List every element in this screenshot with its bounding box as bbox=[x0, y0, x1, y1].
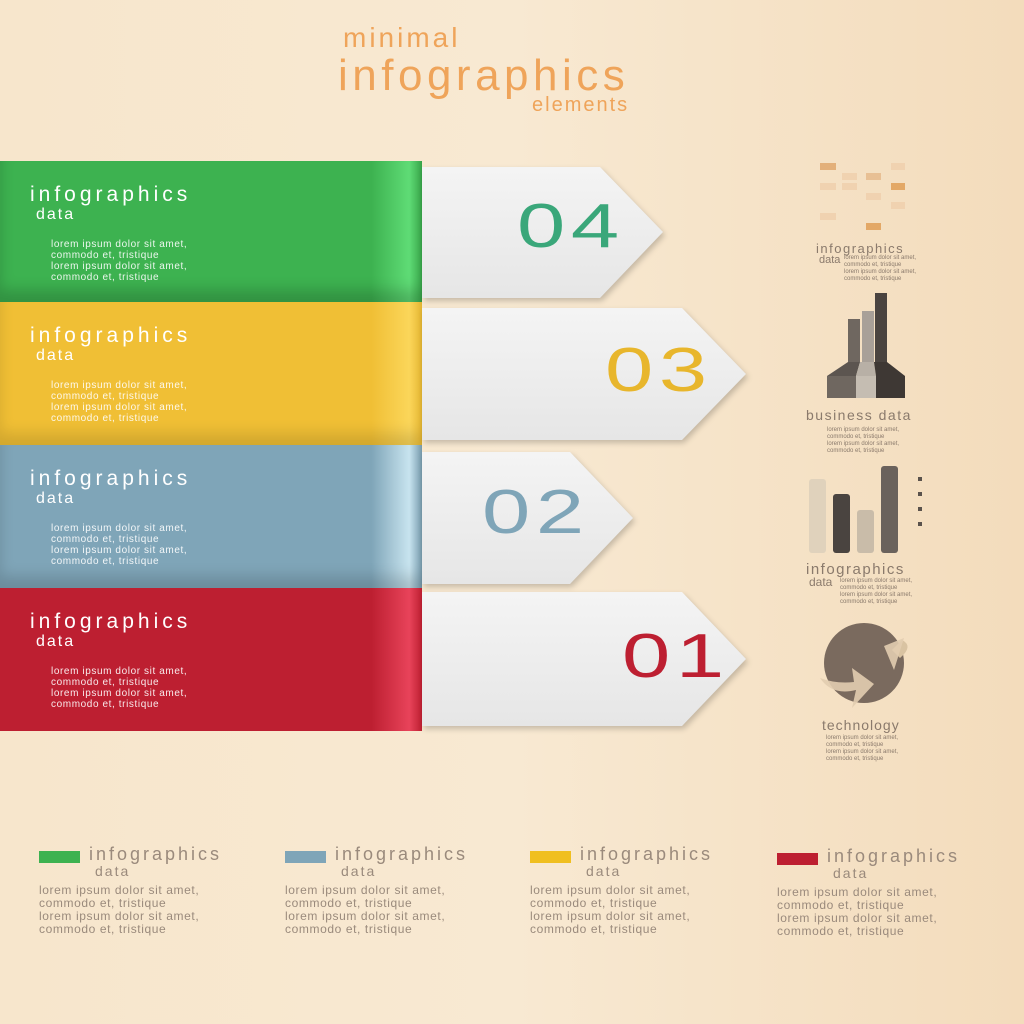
text: lorem ipsum dolor sit amet, bbox=[777, 885, 937, 899]
text: technology: commodo et, tristique bbox=[826, 742, 883, 748]
text: commodo et, tristique bbox=[530, 922, 657, 936]
text: business data bbox=[806, 407, 912, 454]
text: infographics bbox=[827, 846, 960, 866]
text: business data: commodo et, tristique bbox=[827, 448, 884, 454]
panel: green band: data bbox=[36, 206, 75, 223]
text: infographics data 2: commodo et, tristique bbox=[840, 599, 897, 605]
panel: red band: commodo et, tristique bbox=[51, 677, 159, 688]
panel: red band: commodo et, tristique bbox=[51, 699, 159, 710]
panel: red band: infographics bbox=[30, 610, 191, 633]
text: data bbox=[586, 863, 621, 879]
text: technology: technology bbox=[822, 717, 900, 733]
panel: red band: data bbox=[36, 633, 75, 650]
panel: yellow band: lorem ipsum dolor sit amet, bbox=[51, 380, 187, 391]
panel: green band: commodo et, tristique bbox=[51, 250, 159, 261]
text: infographics data 2: infographics bbox=[806, 561, 905, 578]
text: infographics data 2: commodo et, tristique bbox=[840, 585, 897, 591]
text: technology: lorem ipsum dolor sit amet, bbox=[826, 749, 898, 755]
icon: globe bbox=[820, 623, 908, 708]
arrow 04 bbox=[422, 167, 666, 304]
text: business data: lorem ipsum dolor sit amet, bbox=[827, 441, 899, 447]
text: infographics data 2: data bbox=[809, 575, 832, 589]
panel: green band bbox=[0, 161, 422, 302]
text: data bbox=[341, 863, 376, 879]
panel: green band: infographics bbox=[30, 183, 191, 206]
panel: green band: commodo et, tristique bbox=[51, 272, 159, 283]
panel: green band: lorem ipsum dolor sit amet, bbox=[51, 239, 187, 250]
text: data bbox=[833, 865, 868, 881]
panel: blue band: lorem ipsum dolor sit amet, bbox=[51, 523, 187, 534]
panel: blue band: infographics bbox=[30, 467, 191, 490]
text: infographics bbox=[580, 844, 713, 864]
text: infographics bbox=[335, 844, 468, 864]
text: lorem ipsum dolor sit amet, bbox=[777, 911, 937, 925]
text: commodo et, tristique bbox=[777, 898, 904, 912]
text: technology bbox=[822, 717, 900, 762]
icon: bar chart bbox=[809, 466, 922, 553]
title: infographics bbox=[338, 51, 629, 100]
arrow 04: 04 bbox=[517, 192, 625, 261]
panel: yellow band: lorem ipsum dolor sit amet, bbox=[51, 402, 187, 413]
text: infographics bbox=[89, 844, 222, 864]
arrow 02: 02 bbox=[482, 478, 590, 547]
text: infographics data 1: lorem ipsum dolor sit amet, bbox=[844, 255, 916, 261]
panel: red band: lorem ipsum dolor sit amet, bbox=[51, 688, 187, 699]
text: infographics data 2: lorem ipsum dolor sit amet, bbox=[840, 578, 912, 584]
legend: green bbox=[39, 844, 222, 936]
panel: yellow band: infographics bbox=[30, 324, 191, 347]
panel: yellow band: data bbox=[36, 347, 75, 364]
text: infographics data 1: commodo et, tristique bbox=[844, 276, 901, 282]
panel: blue band: lorem ipsum dolor sit amet, bbox=[51, 545, 187, 556]
text: commodo et, tristique bbox=[777, 924, 904, 938]
text: lorem ipsum dolor sit amet, bbox=[285, 883, 445, 897]
text: commodo et, tristique bbox=[39, 922, 166, 936]
title: elements bbox=[532, 94, 629, 116]
text: lorem ipsum dolor sit amet, bbox=[285, 909, 445, 923]
text: infographics data 2 bbox=[806, 561, 912, 605]
text: lorem ipsum dolor sit amet, bbox=[39, 909, 199, 923]
title bbox=[338, 22, 629, 116]
text: commodo et, tristique bbox=[530, 896, 657, 910]
text: infographics data 2: lorem ipsum dolor sit amet, bbox=[840, 592, 912, 598]
title: minimal bbox=[343, 22, 460, 53]
panel: blue band: data bbox=[36, 490, 75, 507]
arrow 01: 01 bbox=[622, 622, 730, 691]
legend: blue bbox=[285, 844, 468, 936]
text: technology: commodo et, tristique bbox=[826, 756, 883, 762]
text: business data: business data bbox=[806, 407, 912, 423]
panel: red band bbox=[0, 588, 422, 731]
legend: yellow bbox=[530, 844, 713, 936]
text: lorem ipsum dolor sit amet, bbox=[530, 883, 690, 897]
arrow 01 bbox=[422, 592, 749, 732]
icon: 3d business chart bbox=[827, 293, 905, 398]
text: commodo et, tristique bbox=[285, 896, 412, 910]
arrow 03: 03 bbox=[605, 336, 713, 405]
text: data bbox=[95, 863, 130, 879]
text: commodo et, tristique bbox=[39, 896, 166, 910]
text: lorem ipsum dolor sit amet, bbox=[530, 909, 690, 923]
text: infographics data 1: lorem ipsum dolor sit amet, bbox=[844, 269, 916, 275]
text: infographics data 1: infographics bbox=[816, 241, 904, 256]
panel: red band: lorem ipsum dolor sit amet, bbox=[51, 666, 187, 677]
text: technology: lorem ipsum dolor sit amet, bbox=[826, 735, 898, 741]
text: business data: commodo et, tristique bbox=[827, 434, 884, 440]
text: lorem ipsum dolor sit amet, bbox=[39, 883, 199, 897]
arrow 02 bbox=[422, 452, 636, 590]
text: business data: lorem ipsum dolor sit amet, bbox=[827, 427, 899, 433]
text: infographics data 1: commodo et, tristique bbox=[844, 262, 901, 268]
panel: yellow band: commodo et, tristique bbox=[51, 413, 159, 424]
panel: yellow band bbox=[0, 302, 422, 445]
text: commodo et, tristique bbox=[285, 922, 412, 936]
legend: red bbox=[777, 846, 960, 938]
text: infographics data 1: data bbox=[819, 254, 840, 266]
panel: blue band: commodo et, tristique bbox=[51, 556, 159, 567]
panel: yellow band: commodo et, tristique bbox=[51, 391, 159, 402]
arrow 03 bbox=[422, 308, 749, 446]
panel: blue band bbox=[0, 445, 422, 588]
panel: green band: lorem ipsum dolor sit amet, bbox=[51, 261, 187, 272]
icon: pixel grid bbox=[820, 163, 905, 230]
panel: blue band: commodo et, tristique bbox=[51, 534, 159, 545]
text: infographics data 1 bbox=[816, 241, 916, 282]
